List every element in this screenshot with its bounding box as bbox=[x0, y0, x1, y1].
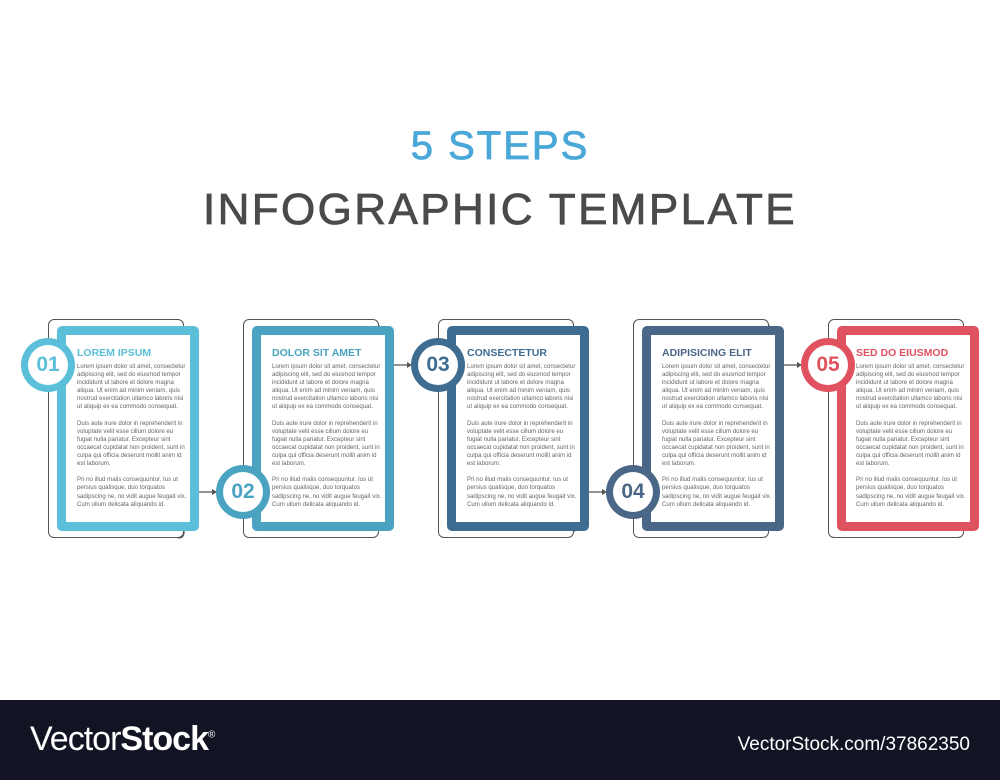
text: Cum ullum delicata aliquando id. bbox=[856, 501, 944, 508]
text: 01 bbox=[36, 353, 60, 376]
text: sadipscing ne, no vidit augue feugait vix. bbox=[467, 492, 576, 500]
title bbox=[203, 124, 797, 234]
text: aliqua. Ut enim ad minim veniam, quis bbox=[856, 387, 959, 394]
text: Pri no illud malis consequuntur. Ius ut bbox=[272, 476, 373, 483]
text: est laborum. bbox=[272, 460, 306, 467]
text: adipiscing elit, sed do eiusmod tempor bbox=[77, 371, 181, 378]
text: sadipscing ne, no vidit augue feugait vix. bbox=[662, 492, 771, 500]
text: occaecat cupidatat non proident, sunt in bbox=[272, 444, 380, 451]
text: est laborum. bbox=[856, 460, 890, 467]
text: Duis aute irure dolor in reprehenderit in bbox=[856, 420, 962, 427]
text: 04 bbox=[621, 480, 645, 503]
footer: VectorStock.com/37862350 bbox=[738, 734, 970, 755]
text: Cum ullum delicata aliquando id. bbox=[272, 501, 360, 508]
text: ut aliquip ex ea commodo consequat. bbox=[467, 403, 568, 410]
text: culpa qui officia deserunt mollit anim id bbox=[856, 452, 961, 459]
text: occaecat cupidatat non proident, sunt in bbox=[662, 444, 770, 451]
text: nostrud exercitation ullamco laboris nisi bbox=[856, 395, 962, 402]
text: Cum ullum delicata aliquando id. bbox=[77, 501, 165, 508]
text: occaecat cupidatat non proident, sunt in bbox=[77, 444, 185, 451]
text: Duis aute irure dolor in reprehenderit in bbox=[272, 420, 378, 427]
text: Duis aute irure dolor in reprehenderit in bbox=[662, 420, 768, 427]
text: persius qualisque, duo torquatos bbox=[77, 484, 165, 491]
text: incididunt ut labore et dolore magna bbox=[77, 379, 174, 386]
text: Duis aute irure dolor in reprehenderit in bbox=[467, 420, 573, 427]
footer: VectorStock® bbox=[30, 720, 214, 758]
text: fugiat nulla pariatur. Excepteur sint bbox=[662, 436, 756, 443]
text: nostrud exercitation ullamco laboris nisi bbox=[467, 395, 573, 402]
text: ADIPISICING ELIT bbox=[662, 347, 752, 359]
panel: step 3 bbox=[411, 319, 589, 538]
text: voluptate velit esse cillum dolore eu bbox=[662, 428, 758, 435]
text: sadipscing ne, no vidit augue feugait vix. bbox=[856, 492, 965, 500]
text: aliqua. Ut enim ad minim veniam, quis bbox=[272, 387, 375, 394]
title: INFOGRAPHIC TEMPLATE bbox=[203, 185, 797, 234]
text: aliqua. Ut enim ad minim veniam, quis bbox=[467, 387, 570, 394]
text: incididunt ut labore et dolore magna bbox=[662, 379, 759, 386]
text: voluptate velit esse cillum dolore eu bbox=[272, 428, 368, 435]
text: ut aliquip ex ea commodo consequat. bbox=[856, 403, 957, 410]
title: 5 STEPS bbox=[411, 124, 589, 168]
text: Pri no illud malis consequuntur. Ius ut bbox=[662, 476, 763, 483]
text: Lorem ipsum dolor sit amet, consectetur bbox=[77, 363, 185, 370]
text: Lorem ipsum dolor sit amet, consectetur bbox=[467, 363, 575, 370]
panel: step 5 bbox=[801, 319, 979, 538]
text: DOLOR SIT AMET bbox=[272, 347, 361, 359]
text: SED DO EIUSMOD bbox=[856, 347, 948, 359]
text: aliqua. Ut enim ad minim veniam, quis bbox=[77, 387, 180, 394]
text: persius qualisque, duo torquatos bbox=[856, 484, 944, 491]
text: sadipscing ne, no vidit augue feugait vix. bbox=[77, 492, 186, 500]
text: ut aliquip ex ea commodo consequat. bbox=[77, 403, 178, 410]
panel: step 4 bbox=[606, 319, 784, 538]
text: Lorem ipsum dolor sit amet, consectetur bbox=[662, 363, 770, 370]
text: Lorem ipsum dolor sit amet, consectetur bbox=[856, 363, 964, 370]
text: 05 bbox=[816, 353, 840, 376]
text: fugiat nulla pariatur. Excepteur sint bbox=[77, 436, 170, 443]
text: occaecat cupidatat non proident, sunt in bbox=[467, 444, 575, 451]
text: persius qualisque, duo torquatos bbox=[467, 484, 555, 491]
text: culpa qui officia deserunt mollit anim id bbox=[467, 452, 572, 459]
text: aliqua. Ut enim ad minim veniam, quis bbox=[662, 387, 765, 394]
text: incididunt ut labore et dolore magna bbox=[856, 379, 953, 386]
text: voluptate velit esse cillum dolore eu bbox=[467, 428, 563, 435]
text: 03 bbox=[426, 353, 450, 376]
text: est laborum. bbox=[467, 460, 501, 467]
text: persius qualisque, duo torquatos bbox=[662, 484, 750, 491]
text: ut aliquip ex ea commodo consequat. bbox=[272, 403, 373, 410]
footer bbox=[0, 700, 1000, 780]
text: adipiscing elit, sed do eiusmod tempor bbox=[467, 371, 571, 378]
text: culpa qui officia deserunt mollit anim id bbox=[272, 452, 377, 459]
text: adipiscing elit, sed do eiusmod tempor bbox=[662, 371, 766, 378]
text: CONSECTETUR bbox=[467, 347, 547, 359]
text: nostrud exercitation ullamco laboris nisi bbox=[662, 395, 768, 402]
text: LOREM IPSUM bbox=[77, 347, 151, 359]
text: nostrud exercitation ullamco laboris nisi bbox=[272, 395, 378, 402]
text: fugiat nulla pariatur. Excepteur sint bbox=[856, 436, 950, 443]
text: Cum ullum delicata aliquando id. bbox=[467, 501, 555, 508]
text: voluptate velit esse cillum dolore eu bbox=[856, 428, 952, 435]
text: 02 bbox=[231, 480, 255, 503]
text: Pri no illud malis consequuntur. Ius ut bbox=[856, 476, 957, 483]
text: adipiscing elit, sed do eiusmod tempor bbox=[856, 371, 960, 378]
text: Cum ullum delicata aliquando id. bbox=[662, 501, 750, 508]
text: Pri no illud malis consequuntur. Ius ut bbox=[467, 476, 568, 483]
text: fugiat nulla pariatur. Excepteur sint bbox=[272, 436, 366, 443]
text: Duis aute irure dolor in reprehenderit in bbox=[77, 420, 183, 427]
text: Pri no illud malis consequuntur. Ius ut bbox=[77, 476, 178, 483]
text: occaecat cupidatat non proident, sunt in bbox=[856, 444, 964, 451]
text: nostrud exercitation ullamco laboris nisi bbox=[77, 395, 183, 402]
text: incididunt ut labore et dolore magna bbox=[272, 379, 369, 386]
text: culpa qui officia deserunt mollit anim id bbox=[662, 452, 767, 459]
text: adipiscing elit, sed do eiusmod tempor bbox=[272, 371, 376, 378]
text: Lorem ipsum dolor sit amet, consectetur bbox=[272, 363, 380, 370]
panel: step 2 bbox=[216, 319, 394, 538]
text: persius qualisque, duo torquatos bbox=[272, 484, 360, 491]
text: voluptate velit esse cillum dolore eu bbox=[77, 428, 173, 435]
text: incididunt ut labore et dolore magna bbox=[467, 379, 564, 386]
text: ut aliquip ex ea commodo consequat. bbox=[662, 403, 763, 410]
text: est laborum. bbox=[662, 460, 696, 467]
text: sadipscing ne, no vidit augue feugait vix. bbox=[272, 492, 381, 500]
text: est laborum. bbox=[77, 460, 111, 467]
panel: step 1 bbox=[21, 319, 199, 538]
text: culpa qui officia deserunt mollit anim id bbox=[77, 452, 182, 459]
text: fugiat nulla pariatur. Excepteur sint bbox=[467, 436, 560, 443]
